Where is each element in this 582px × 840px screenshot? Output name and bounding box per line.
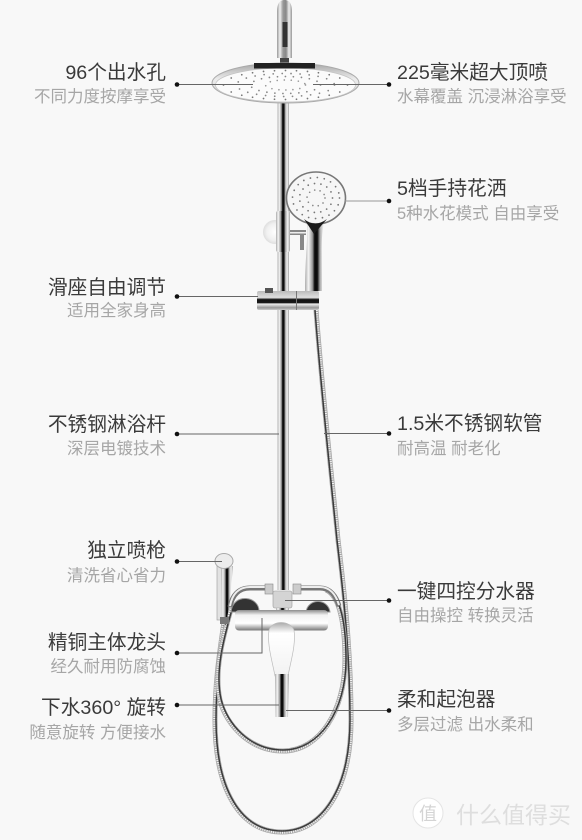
label: stainless rail: 不锈钢淋浴杆	[48, 414, 166, 436]
sliding rail	[278, 100, 289, 590]
label: stainless rail	[48, 414, 166, 458]
label: 1.5m hose: 1.5米不锈钢软管	[397, 413, 542, 435]
label: brass body: 经久耐用防腐蚀	[50, 657, 166, 676]
label: slider seat: 适用全家身高	[67, 301, 166, 320]
hand shower	[286, 172, 346, 291]
rail bracket	[263, 211, 306, 252]
watermark: 值	[419, 804, 437, 824]
lever handle	[269, 622, 294, 676]
label: diverter	[397, 581, 535, 625]
label: slider seat	[48, 277, 166, 320]
label: aerator	[397, 689, 534, 734]
label: 96 holes: 不同力度按摩享受	[34, 87, 166, 106]
label: aerator: 多层过滤 出水柔和	[397, 715, 534, 734]
watermark	[413, 798, 571, 828]
bidet spray gun	[215, 554, 233, 625]
slider seat	[257, 288, 319, 310]
upper connection pipes	[230, 584, 339, 607]
watermark: 什么值得买	[456, 802, 571, 828]
shower set product illustration	[212, 0, 359, 832]
label: 1.5m hose: 耐高温 耐老化	[397, 439, 501, 458]
label: spray gun: 清洗省心省力	[67, 566, 166, 585]
label: 5-mode hand shower: 5档手持花洒	[397, 178, 506, 200]
label: spray gun: 独立喷枪	[87, 540, 166, 562]
label: 96 holes: 96个出水孔	[65, 62, 166, 84]
label: 96 holes	[34, 62, 166, 106]
overhead rain shower head	[212, 63, 359, 103]
label: 5-mode hand shower: 5种水花模式 自由享受	[397, 204, 559, 223]
label: 225mm top spray: 225毫米超大顶喷	[397, 62, 548, 84]
label: diverter: 一键四控分水器	[397, 581, 535, 603]
label: brass body	[48, 632, 166, 676]
four-way diverter	[273, 591, 292, 622]
label: slider seat: 滑座自由调节	[48, 277, 166, 299]
label: 360 spout: 下水360° 旋转	[41, 697, 166, 719]
leader dots	[175, 82, 391, 713]
wall escutcheons	[231, 598, 330, 612]
leader lines	[177, 84, 389, 710]
flexible hose: inner loop	[218, 590, 346, 751]
label: 1.5m hose	[397, 413, 542, 458]
label: 360 spout: 随意旋转 方便接水	[29, 723, 166, 742]
flexible hose: outer loop	[215, 310, 351, 832]
overhead shower arm	[277, 0, 292, 63]
brass valve body	[235, 610, 328, 630]
spout and aerator	[275, 674, 289, 717]
label: spray gun	[67, 540, 166, 585]
label: aerator: 柔和起泡器	[397, 689, 496, 711]
label: diverter: 自由操控 转换灵活	[397, 606, 534, 625]
label: 360 spout	[29, 697, 166, 742]
label: brass body: 精铜主体龙头	[48, 632, 166, 654]
label: 225mm top spray	[397, 62, 567, 106]
label: 5-mode hand shower	[397, 178, 559, 223]
label: 225mm top spray: 水幕覆盖 沉浸淋浴享受	[397, 87, 567, 106]
label: stainless rail: 深层电镀技术	[67, 439, 166, 458]
